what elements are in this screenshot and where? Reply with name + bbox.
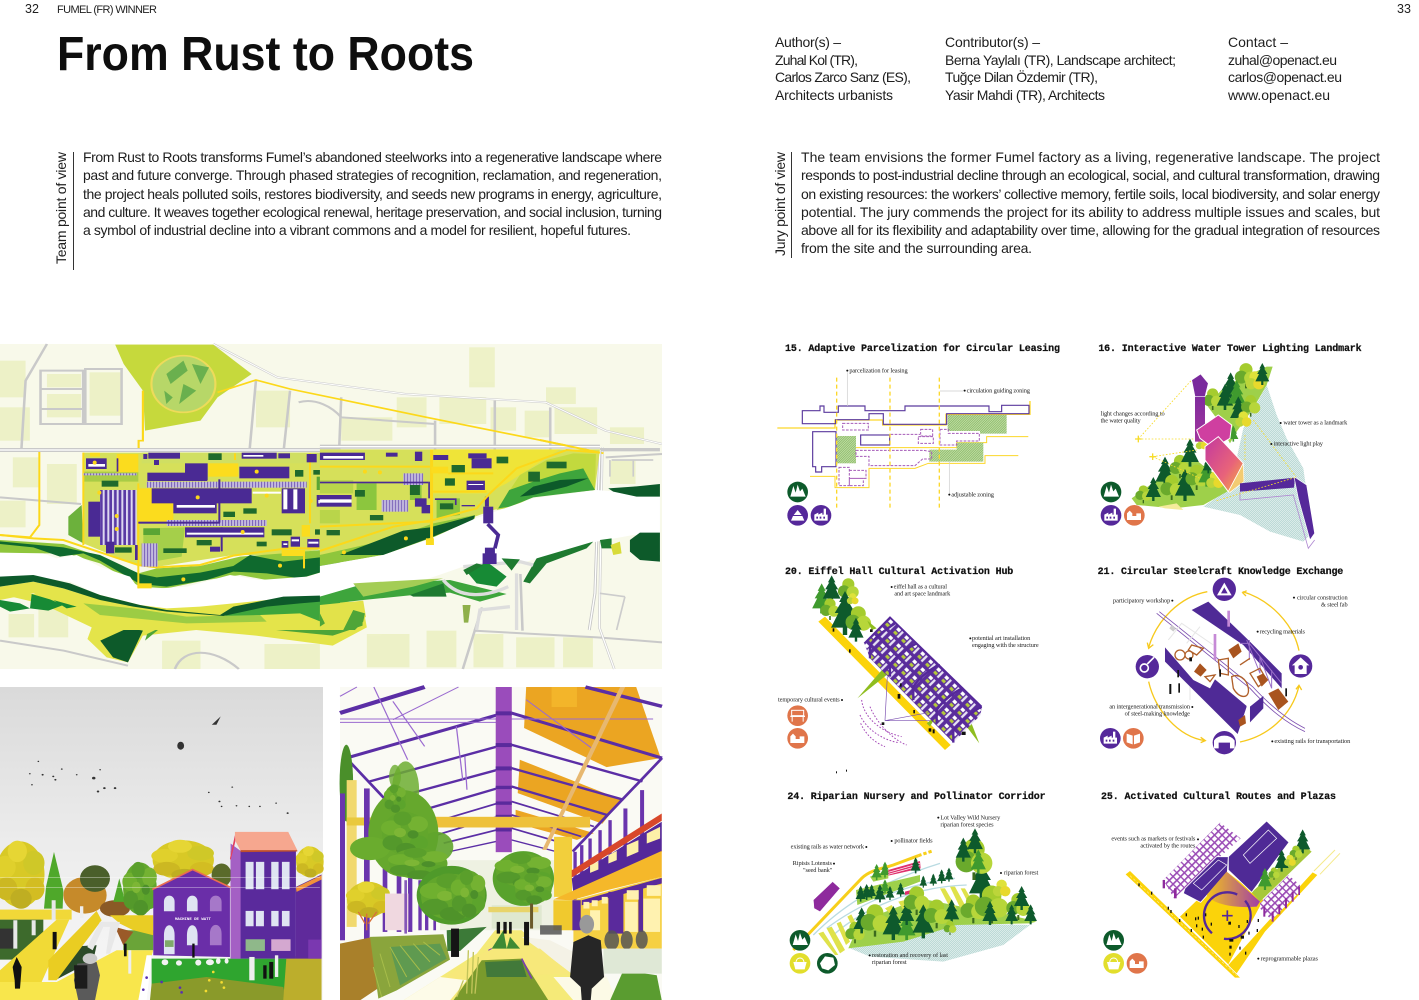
yellow walls: [347, 780, 357, 927]
page header: left folio and section: FUMEL (FR) WINNER: [57, 4, 157, 16]
background trees: [0, 841, 45, 909]
jury text block: above all for its flexibility and adaptability over time, allowing for the gradual integration of resources: [801, 222, 1380, 238]
icons: [1103, 930, 1147, 974]
banks: [0, 540, 340, 588]
birds: [29, 716, 289, 814]
site ground: [83, 453, 340, 567]
seating arcs and lines: [885, 677, 930, 721]
icons: [1100, 728, 1144, 749]
credits: contact: www.openact.eu: [1227, 87, 1330, 103]
page header: left folio and section: [25, 2, 157, 16]
annotation labels: [846, 367, 1031, 498]
credits: authors: [775, 34, 911, 103]
diagram 15: adaptive parcelization: [777, 343, 1060, 526]
lawn and planting: [152, 959, 297, 1000]
annotation labels: [791, 814, 1039, 966]
annotation labels: activated by the routes: [1140, 843, 1196, 850]
jury text block: The team envisions the former Fumel factory as a living, regenerative landscape. The project: [801, 149, 1380, 165]
jury text block: from the site and the surrounding area.: [801, 240, 1032, 256]
annotation labels: riparian forest species: [940, 821, 994, 828]
streets: [0, 344, 662, 669]
rails and frame: [1157, 612, 1305, 732]
annotation labels: riparian forest: [872, 959, 907, 966]
hall buildings: [1197, 415, 1232, 448]
north bank east: [320, 515, 475, 566]
bridge island: [468, 562, 507, 587]
credits: contributors: Berna Yaylalı (TR), Landscape architect;: [945, 52, 1176, 68]
annotation labels: existing rails as water network: [791, 844, 865, 851]
icons: [787, 705, 808, 749]
credits: contact: Contact –: [1228, 34, 1288, 50]
industrial wing: [1240, 477, 1315, 548]
annotation labels: engaging with the structure: [972, 642, 1039, 649]
people: [13, 932, 273, 989]
lime garden strip: [1252, 845, 1312, 902]
jury text block: on existing resources: the workers’ collective memory, fertile soils, local biodiversity, and solar energy: [801, 186, 1380, 202]
orange panels: [516, 687, 661, 840]
water tower: [1192, 374, 1208, 442]
annotation labels: events such as markets or festivals: [1111, 836, 1196, 843]
icons: [790, 930, 838, 974]
masterplan map: [0, 343, 662, 670]
lower scene: [0, 832, 324, 1000]
cycle icons: [1136, 578, 1312, 754]
credits: contributors: Contributor(s) –: [945, 34, 1040, 50]
river east: [320, 490, 660, 597]
lattice canopies: [1163, 823, 1241, 898]
trees: [812, 575, 871, 642]
icons: [1101, 482, 1145, 526]
west buildings: [83, 473, 307, 567]
credits: authors: Architects urbanists: [775, 87, 893, 103]
annotation labels: of steel-making knowledge: [1125, 711, 1190, 718]
diagram 16: water tower lighting: [1098, 343, 1362, 548]
cafe crowd and terrace: [540, 925, 648, 950]
yellow plaza and ramps: [0, 950, 153, 1000]
photo: hall interior: [339, 685, 664, 1000]
heading: 21. Circular Steelcraft Knowledge Exchange: [1098, 566, 1343, 577]
credits: contact: zuhal@openact.eu: [1228, 52, 1337, 68]
diagram 25: cultural routes and plazas: [1101, 791, 1340, 978]
credits: contact: [1227, 34, 1342, 103]
credits: contact: carlos@openact.eu: [1228, 69, 1342, 85]
team text block: and culture. It weaves together ecological renewal, heritage preservation, and social inclusion, turning: [83, 204, 662, 220]
annotation labels: reprogrammable plazas: [1261, 955, 1319, 962]
diagram 21: steelcraft knowledge exchange: [1098, 566, 1351, 754]
upper foliage: [340, 745, 419, 821]
annotation labels: potential art installation: [972, 635, 1031, 642]
jury text block: responds to post-industrial decline through an ecological, social, and cultural transformation, drawing: [801, 167, 1380, 183]
diagram 20: Eiffel hall: [778, 566, 1039, 773]
page number right: 33: [1397, 2, 1411, 16]
north park: [115, 345, 252, 431]
credits: authors: Carlos Zarco Sanz (ES),: [775, 69, 911, 85]
mezzanine: [572, 822, 662, 894]
side label: team point of view: Team point of view: [53, 151, 69, 264]
annotation labels: parcelization for leasing: [849, 367, 908, 374]
steel trusses: [340, 687, 662, 852]
title: From Rust to Roots: [57, 28, 474, 81]
credits: contributors: Yasir Mahdi (TR), Architects: [945, 87, 1105, 103]
trees lower: [1135, 438, 1224, 503]
east half of the site: [320, 440, 660, 630]
annotation labels: & steel fab: [1321, 601, 1348, 608]
west yellow greenways: [0, 452, 340, 588]
pollinator strips: [818, 887, 972, 955]
team text block: the project heals polluted soils, restores biodiversity, and seeds new programs in energy, agriculture,: [83, 186, 662, 202]
credits: contributors: Tuğçe Dilan Özdemir (TR),: [945, 68, 1098, 85]
fan: [1207, 872, 1260, 907]
building sign: MACHINE DE WATT: [175, 918, 212, 922]
hall roof: [864, 617, 982, 743]
annotation labels: pollinator fields: [894, 838, 933, 845]
planting beds: [340, 937, 380, 1000]
purple roofs: [1192, 602, 1282, 688]
columns: [340, 788, 644, 944]
team text block: [83, 149, 662, 238]
riparian forest: [845, 828, 1037, 943]
annotation labels: restoration and recovery of last: [872, 952, 948, 959]
photo: Machine de Watt building: [0, 687, 324, 1000]
annotation labels: circulation guiding zoning: [967, 387, 1031, 394]
trees: [346, 881, 390, 918]
annotation labels: participatory workshop: [1113, 598, 1170, 605]
heading: 24. Riparian Nursery and Pollinator Corridor: [787, 791, 1046, 802]
annotation labels: riparian forest: [1004, 870, 1039, 877]
annotation labels: Ripisis Lotensis: [793, 860, 833, 867]
green behind ramps: [0, 920, 43, 960]
materials: [1175, 645, 1267, 696]
yellow path and rails: [793, 851, 967, 950]
heading: 20. Eiffel Hall Cultural Activation Hub: [785, 566, 1013, 577]
annotation labels: adjustable zoning: [951, 491, 995, 498]
annotation labels: temporary cultural events: [778, 697, 840, 704]
circular arrows: [1149, 592, 1299, 742]
annotation labels: the water quality: [1101, 417, 1141, 424]
annotation labels: [778, 584, 1039, 704]
annotation labels: light changes according to: [1101, 410, 1165, 417]
annotation labels: "seed bank": [803, 867, 833, 874]
lower hall, drawn to scale: [340, 780, 662, 1000]
annotation labels: water tower as a landmark: [1283, 420, 1348, 427]
purple halls: [1228, 821, 1289, 892]
heading: 16. Interactive Water Tower Lighting Landmark: [1098, 343, 1362, 354]
team text block: a symbol of industrial decline into a vibrant commons and a model for resilient, hopeful futures.: [83, 222, 631, 238]
team text block: past and future converge. Through phased strategies of recognition, reclamation, and regeneration,: [83, 167, 662, 183]
east buildings: [382, 473, 423, 512]
side label: jury point of view: Jury point of view: [772, 151, 788, 256]
lower facade: [573, 877, 662, 949]
team text block: From Rust to Roots transforms Fumel’s abandoned steelworks into a regenerative landscape where: [83, 149, 662, 165]
plaza ring: [1204, 892, 1251, 939]
annotation labels: interactive light play: [1274, 441, 1324, 448]
people: [451, 922, 529, 957]
annotation labels: [1109, 594, 1351, 745]
annotation labels: [1101, 410, 1348, 448]
page header: left folio and section: 32: [25, 2, 39, 16]
annotation labels: and art space landmark: [894, 591, 951, 598]
seed bank: [813, 882, 840, 912]
nursery rows: [856, 857, 953, 905]
credits: contributors: [945, 34, 1176, 103]
trees: [1258, 829, 1310, 890]
wood beam: [542, 687, 625, 850]
icons: [787, 482, 831, 526]
annotation labels: existing rails for transportation: [1274, 738, 1351, 745]
annotation labels: recycling materials: [1260, 628, 1306, 635]
yellow greenway lines: [139, 380, 604, 453]
credits: authors: Zuhal Kol (TR),: [775, 52, 858, 68]
yellow routes and plaza: [1126, 871, 1240, 978]
south bank: [0, 582, 340, 630]
light rays: [1138, 380, 1296, 501]
jury text block: potential. The jury commends the project for its ability to address multiple issues and scales, but: [801, 204, 1380, 220]
ground: [403, 930, 607, 1000]
south bank east: [523, 542, 593, 583]
annotation labels: circular construction: [1297, 594, 1348, 601]
credits: authors: Author(s) –: [775, 34, 841, 50]
building: [153, 870, 230, 957]
diagram 24: riparian nursery: [787, 791, 1046, 974]
trees upper: [1203, 363, 1269, 442]
annotation labels: Lot Valley Wild Nursery: [940, 814, 1001, 821]
west half of the site: [0, 448, 340, 630]
south bank meadow: [0, 594, 367, 662]
annotation labels: an intergenerational transmission: [1109, 704, 1191, 711]
river: [0, 553, 340, 608]
jury text block: [801, 149, 1380, 256]
annotation labels: [1111, 836, 1319, 962]
heading: 25. Activated Cultural Routes and Plazas: [1101, 791, 1336, 802]
annotation labels: eiffel hall as a cultural: [894, 584, 947, 591]
heading: 15. Adaptive Parcelization for Circular Leasing: [785, 343, 1060, 354]
